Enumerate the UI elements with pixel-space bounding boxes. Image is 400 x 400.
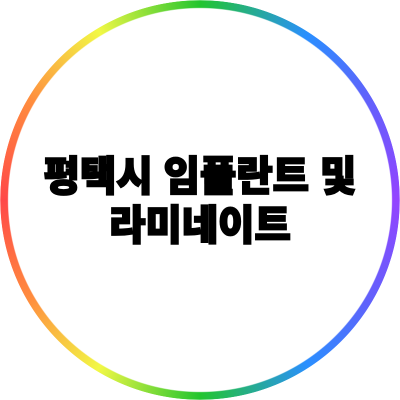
title: 라미네이트 bbox=[109, 203, 291, 249]
title: 평택시 임플란트 및 bbox=[44, 154, 356, 200]
title bbox=[44, 154, 356, 249]
